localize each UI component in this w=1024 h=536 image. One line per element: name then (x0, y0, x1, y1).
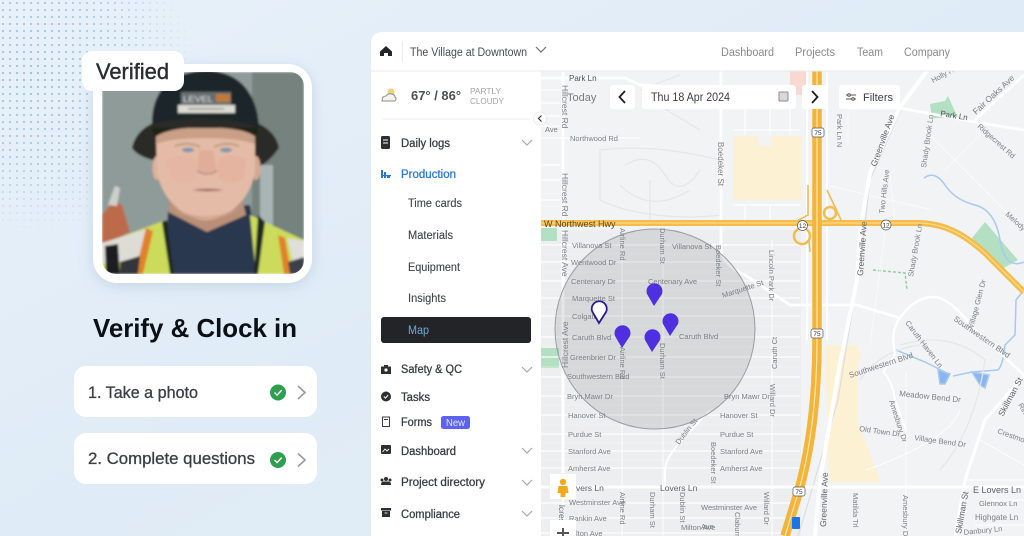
photo of worker (102, 71, 304, 274)
highway shields: 75 (814, 130, 822, 137)
icon: green check (270, 384, 286, 400)
street labels: Skillman St (996, 375, 1024, 418)
street labels: Durham St (648, 492, 657, 529)
submenu items: Time cards (408, 198, 462, 210)
map pins (592, 283, 679, 352)
street labels: Purdue St (568, 430, 602, 439)
badge: Verified: Verified (96, 59, 169, 84)
street labels: Park Ln (940, 109, 968, 122)
menu: Daily logs (381, 136, 532, 150)
street labels: Ave (701, 522, 714, 531)
street labels: Southwestern Blvd (952, 314, 1012, 360)
street labels: Old Town Dr (859, 424, 901, 439)
top nav: Dashboard (721, 47, 774, 59)
menu: Dashboard: Dashboard (401, 446, 456, 458)
street labels: Westminster Ave (701, 503, 757, 512)
street labels: Village Glen Dr (966, 278, 988, 330)
submenu items: Materials (408, 230, 453, 242)
street labels: Centenary Ave (648, 277, 697, 286)
street labels: Boedeker St (716, 142, 725, 187)
top nav (721, 47, 950, 59)
street labels: Caruth Blvd (679, 332, 718, 341)
weather: PARTLY (470, 86, 501, 96)
street labels: W Northwest Hwy (544, 219, 616, 229)
street labels: Stanford Ave (720, 447, 763, 456)
minor streets (541, 85, 1024, 536)
street labels: Park Ln N (835, 114, 844, 147)
street labels: Villanova St (572, 241, 612, 250)
app panel (371, 32, 1024, 536)
street labels: Westminster Ave (569, 498, 625, 507)
collapse button (534, 112, 546, 125)
street labels: Rankin Ave (569, 514, 607, 523)
street labels: Hillcrest Rd (560, 85, 570, 129)
zoom control (550, 520, 576, 536)
highway shields: 12 (882, 222, 890, 230)
street labels: Greenville Ave (855, 221, 869, 276)
street labels: Matilda Trl (851, 493, 860, 528)
badge: New: New (446, 418, 466, 429)
menu: Tasks (381, 392, 430, 404)
street labels: Bryn Mawr Dr (724, 392, 770, 401)
map today label: Today (567, 92, 597, 104)
street labels: Greenbrier Dr (570, 353, 616, 362)
street labels: Holly Hill (930, 63, 960, 85)
street labels: Purdue St (720, 430, 754, 439)
street labels: Two Hills Ave (877, 169, 891, 214)
street labels: Hanover St (720, 411, 758, 420)
highway shields: 75 (795, 489, 803, 496)
step card 1: 1. Take a photo (88, 384, 198, 402)
submenu items (408, 198, 462, 305)
street labels: Durham St (658, 343, 667, 380)
street labels: Dublin St (678, 492, 687, 523)
menu: Project directory: Project directory (401, 477, 485, 489)
street labels: Hillcrest Ave (560, 321, 570, 368)
street labels: Amherst Ave (568, 464, 610, 473)
street labels: Skillman St (953, 490, 970, 534)
street labels: Caruth Blvd (572, 333, 611, 342)
street labels: Villanova St (672, 242, 712, 251)
street labels: Ave (545, 125, 558, 134)
street labels: Dublin St (673, 416, 700, 446)
street labels: Stanford Ave (568, 447, 611, 456)
menu: Safety & QC (381, 364, 532, 376)
highway shields (792, 128, 891, 529)
street labels: Fair Oaks Ave (971, 73, 1016, 116)
step card 2 (74, 433, 317, 484)
street labels: E Lovers Ln (973, 485, 1021, 495)
street labels: Wentwood Dr (571, 258, 617, 267)
menu: Project directory (380, 477, 532, 489)
menu: Compliance (381, 508, 532, 521)
street labels: Greenville Ave (868, 113, 897, 168)
filters button: Filters (863, 92, 893, 104)
weather (382, 86, 504, 106)
street labels: Shady Brook Ln (919, 114, 935, 168)
map (541, 63, 1024, 536)
menu: Tasks: Tasks (401, 392, 430, 404)
street labels: Airline Rd (618, 347, 627, 380)
street labels: Shady Brook Ln (906, 223, 924, 277)
main streets (541, 71, 1024, 536)
street labels: Amherst Ave (720, 464, 762, 473)
land areas (541, 71, 1018, 482)
street labels: Amesbury Dr (887, 399, 909, 444)
street labels: Hanover St (568, 411, 606, 420)
weather: 67° / 86° (411, 88, 461, 103)
park paths (600, 75, 985, 470)
active item: Map (381, 317, 531, 343)
street labels: Park Ln (569, 74, 597, 83)
street labels: Northwood Rd (570, 134, 618, 143)
street labels: Southwestern Blvd (848, 351, 914, 380)
street labels: Hillcrest Rd (560, 173, 570, 217)
street labels: Durham St (658, 228, 667, 265)
header bar (371, 41, 1024, 72)
menu: Daily logs: Daily logs (401, 138, 450, 150)
badge: Verified (82, 51, 184, 91)
project name: The Village at Downtown (410, 47, 527, 59)
street labels: Airline Rd (618, 228, 627, 261)
street labels: Caruth Haven Ln (903, 319, 945, 369)
top nav: Company (904, 47, 950, 59)
menu: Dashboard (381, 445, 532, 458)
icon: green check (270, 452, 286, 468)
street labels: Boedeker St (714, 245, 723, 287)
submenu items: Insights (408, 293, 446, 305)
street labels: Caruth Ct (770, 336, 779, 369)
street labels: Willard Dr (768, 384, 777, 417)
street labels: Glennox Ln (979, 499, 1017, 508)
icon: home (380, 46, 392, 56)
street labels: Marquette St (721, 278, 765, 300)
highway shields: 12 (799, 223, 806, 230)
submenu items: Equipment (408, 262, 461, 274)
street labels: Boedeker St (709, 442, 718, 484)
water (896, 175, 1024, 388)
street labels: Ridgecrest Rd (976, 122, 1017, 160)
weather: CLOUDY (470, 96, 504, 106)
street labels: lcrest (557, 505, 567, 526)
photo card (93, 64, 312, 283)
highway shields: 75 (813, 331, 821, 338)
street labels: Milton Ave (681, 523, 715, 532)
filters button (839, 85, 900, 109)
street labels: Hillcrest Ave (560, 230, 570, 277)
street labels: Bryn Mawr Dr (567, 392, 613, 401)
dotted pattern (2, 2, 184, 221)
step card 2: 2. Complete questions (88, 450, 255, 468)
street labels (544, 63, 1024, 536)
step card 1 (74, 366, 317, 417)
street labels: Greenville Ave (818, 472, 830, 527)
street labels: Meadow Bend Dr (899, 389, 962, 404)
street labels: Southwestern Blvd (567, 372, 630, 381)
street labels: Centenary Dr (571, 277, 616, 286)
street labels: Village Bend Dr (914, 433, 967, 449)
menu: Forms: Forms (401, 417, 432, 429)
street labels: Willard Dr (762, 492, 771, 525)
street labels: vers Ln (576, 483, 604, 493)
rail line (798, 100, 905, 536)
radius circle (555, 229, 755, 429)
street labels: Highgate Ln (975, 513, 1018, 522)
date navigation: Thu 18 Apr 2024 (651, 92, 731, 104)
highways (541, 71, 1024, 536)
photo of worker: LEVEL (183, 95, 214, 104)
date navigation (610, 85, 827, 109)
top nav: Projects (795, 47, 835, 59)
street labels: Airline Rd (618, 492, 627, 525)
menu: Compliance: Compliance (401, 509, 460, 521)
top nav: Team (857, 47, 883, 59)
active item: Map: Map (408, 325, 429, 337)
menu: Safety & QC: Safety & QC (401, 364, 462, 376)
sidebar (380, 86, 546, 521)
street labels: Colgate (572, 312, 598, 321)
menu: Forms (382, 416, 470, 429)
street labels: Lincoln Park Dr (767, 250, 776, 302)
street view control (550, 474, 576, 499)
menu: Production: Production (401, 169, 456, 181)
heading: Verify & Clock in (93, 313, 297, 343)
street labels: Lovers Ln (660, 483, 698, 493)
street labels: Marquette St (572, 294, 616, 303)
